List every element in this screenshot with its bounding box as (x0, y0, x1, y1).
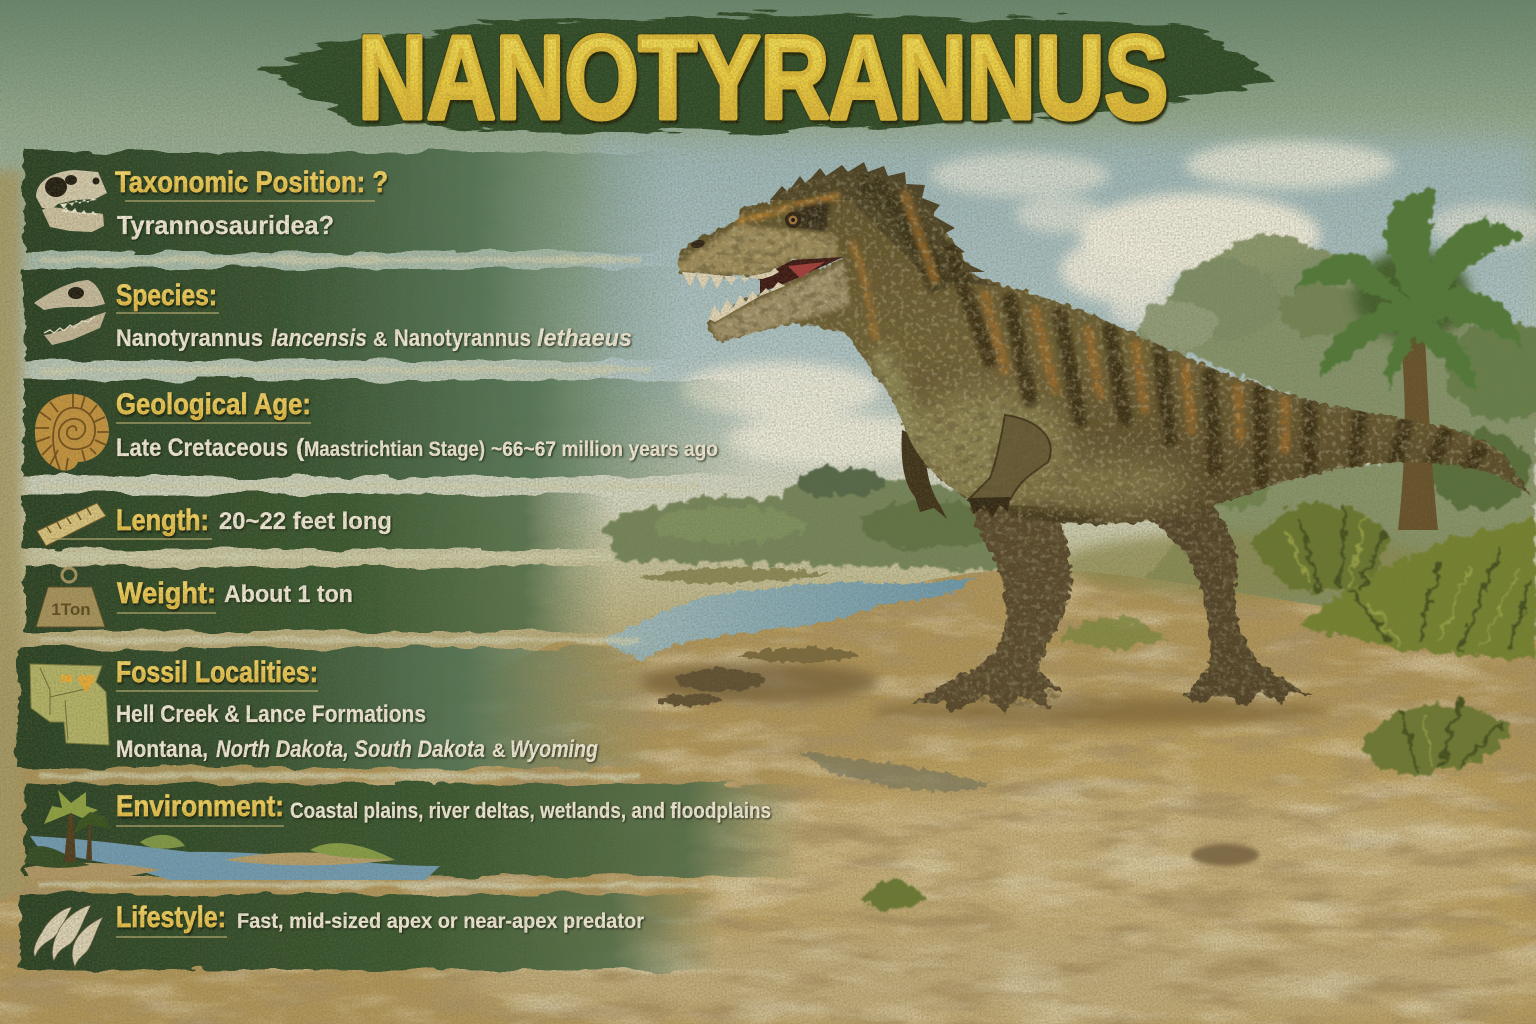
panel background (24, 784, 804, 876)
near arm (968, 415, 1051, 510)
panel background (24, 567, 614, 631)
sky (590, 140, 1536, 510)
rocks on the bank (658, 648, 860, 706)
body markings (670, 160, 1536, 540)
feathered mane (770, 162, 1000, 286)
panel background (24, 494, 614, 549)
value (116, 434, 718, 462)
clouds (680, 141, 1536, 466)
icon: ammonite (35, 394, 109, 471)
panel background (20, 894, 720, 970)
value (116, 325, 632, 352)
panel: fossil localities (18, 648, 658, 768)
heading: Environment: (116, 790, 284, 823)
eye and nostril (690, 212, 801, 249)
value: & (373, 329, 387, 351)
states (116, 736, 598, 763)
value: About 1 ton (224, 581, 353, 608)
heading: Taxonomic Position: ? (115, 166, 388, 199)
value: Nanotyrannus (116, 325, 263, 352)
states: & (492, 741, 506, 762)
mouth and teeth (682, 212, 843, 322)
heading: Length: (116, 504, 209, 537)
heading: Weight: (117, 577, 216, 610)
legs (912, 501, 1312, 714)
left edge parchment (0, 170, 22, 1024)
value: 20~22 feet long (219, 508, 392, 535)
heading: Species: (116, 279, 217, 312)
value: ( (296, 434, 305, 462)
panel: weight (24, 567, 614, 631)
value: Maastrichtian Stage) (304, 438, 485, 461)
states: Wyoming (510, 736, 598, 763)
panel: environment (24, 784, 804, 880)
icon: elongated skull (34, 280, 106, 345)
pale streaks between panels (40, 257, 700, 888)
value: Late Cretaceous (116, 434, 288, 462)
icon: map of states (30, 664, 109, 745)
icon: tyrannosaur skull (36, 170, 107, 232)
title banner (262, 12, 1275, 144)
distant tree line (600, 467, 1010, 570)
icon: ruler (37, 503, 106, 546)
panel: lifestyle (20, 894, 720, 970)
panel background (24, 380, 754, 476)
heading: Geological Age: (116, 388, 311, 421)
value: Coastal plains, river deltas, wetlands, and floodplains (290, 798, 771, 823)
heading: Fossil Localities: (116, 656, 318, 689)
ground (0, 533, 1536, 1024)
dinosaur body (677, 172, 1532, 524)
value: lancensis (271, 325, 367, 352)
river (600, 568, 990, 791)
panel background (18, 648, 658, 768)
panel: length (24, 494, 614, 549)
value: Fast, mid-sized apex or near-apex predator (237, 910, 644, 933)
banner brush stroke (262, 16, 1275, 134)
icon: claws (34, 905, 103, 967)
icon: one ton weight (36, 568, 105, 627)
claws on hand (968, 497, 1010, 518)
dinosaur (670, 160, 1536, 720)
icon: river landscape (24, 790, 440, 880)
title: NANOTYRANNUS (358, 12, 1168, 144)
icon: one ton weight: 1Ton (51, 600, 91, 619)
heading: Lifestyle: (116, 901, 226, 934)
panel: species (24, 268, 684, 360)
right jungle (1120, 236, 1536, 640)
far arm (902, 430, 947, 519)
states: North Dakota, South Dakota (216, 736, 485, 763)
panel: taxonomic position (24, 152, 674, 252)
value: Tyrannosauridea? (117, 210, 334, 240)
formations: Hell Creek & Lance Formations (116, 701, 426, 728)
value: lethaeus (537, 325, 632, 352)
panel: geological age (24, 380, 754, 476)
palm tree (1292, 188, 1525, 530)
ferns (860, 503, 1536, 909)
states: Montana, (116, 736, 208, 763)
panel background (24, 152, 674, 252)
value: ~66~67 million years ago (491, 438, 718, 461)
panel background (24, 268, 684, 360)
value: Nanotyrannus (394, 325, 531, 352)
